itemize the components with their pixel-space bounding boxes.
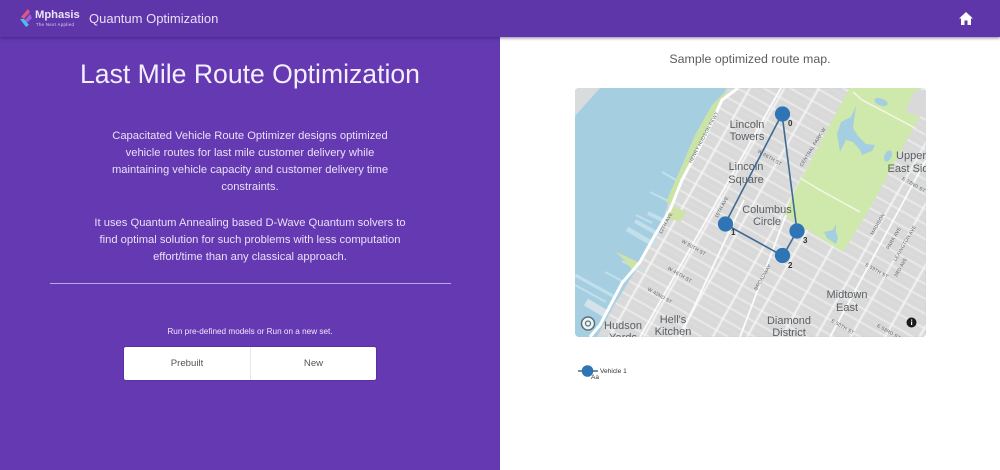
highway [590,88,738,337]
avenue highlights [640,88,926,337]
app name: Quantum Optimization [89,11,218,26]
stop labels: 1 [731,228,736,237]
place labels: Lincoln [729,161,763,173]
stop labels [731,119,808,270]
reservoir and lakes [837,106,875,155]
text block: quantum annealing description: effort/time than any classical approach. [153,250,347,262]
park path [853,92,915,128]
street labels: W 66TH ST [756,149,783,167]
button: Prebuilt: Prebuilt [171,358,203,369]
piers [575,172,683,314]
street labels: W 42ND ST [646,287,673,306]
street labels: 12TH AVE [658,212,674,235]
panel: left purple intro [0,0,500,470]
text block: optimizer description [112,130,388,192]
stop 0 [775,106,790,122]
place labels: Lincoln [730,119,764,131]
logo mark [20,9,32,27]
map provider badge [582,317,594,330]
stop labels: 2 [788,261,793,270]
button group [124,347,376,380]
place labels: Towers [730,131,765,143]
street labels: HENRY HUDSON PKWY [688,110,721,164]
street labels: MADISON [870,212,887,236]
legend: vehicle 1 [578,365,627,381]
street labels: LEXINGTON AVE [892,224,918,263]
land: Manhattan street grid [597,88,926,337]
street labels: E 59TH ST [864,262,889,280]
route lines: vehicle 1 [725,114,797,256]
title: Last Mile Route Optimization [80,59,420,89]
street labels: 3RD AVE [893,257,909,278]
text block: quantum annealing description: find optimal solution for such problems with less computation [100,234,400,246]
riverside park [666,90,727,205]
button: New: New [304,358,323,369]
legend: vehicle 1: Vehicle 1 [600,368,627,375]
place labels: Diamond [767,315,811,327]
icon: home [959,12,973,25]
street labels: PARK AVE [885,226,903,251]
pier park [616,252,640,272]
street labels: BROADWAY [753,263,773,292]
stop labels: 0 [788,119,793,128]
place labels: Upper [896,150,926,162]
land: New Jersey corner [575,88,600,116]
stop labels: 3 [803,236,808,245]
button: Prebuilt [124,347,251,380]
map heading: Sample optimized route map. [669,52,831,66]
text block: quantum annealing description: It uses Quantum Annealing based D-Wave Quantum solvers to [94,216,406,228]
street labels: E 72ND ST [901,176,926,194]
header bar [0,0,1000,37]
place labels: Square [728,174,764,186]
run options caption: Run pre-defined models or Run on a new set. [167,327,333,336]
chart: route map [575,88,926,337]
place labels: Circle [753,216,781,228]
text block: quantum annealing description [94,216,406,262]
park: Central Park [785,88,926,252]
wordmark: Mphasis [35,9,80,21]
place labels [604,119,928,344]
place labels: East [836,302,858,314]
legend: vehicle 1: Aa [591,374,599,381]
street labels: W 46TH ST [666,266,693,284]
place labels: Hell's [660,314,687,326]
stop 3 [789,223,805,239]
water: Hudson River [575,88,926,337]
place labels: Hudson [604,320,642,332]
logo: Mphasis [20,9,80,27]
street labels: 10TH AVE [714,196,730,219]
route stops [718,106,805,263]
text block: optimizer description: vehicle routes for last mile customer delivery while [126,146,374,158]
street labels [646,110,926,341]
text block: optimizer description: constraints. [221,180,279,192]
museum block [905,90,926,118]
place labels: Midtown [827,289,867,301]
stop 1 [718,216,733,232]
stop 2 [775,248,790,263]
tagline: The Next Applied [36,22,74,27]
place labels: Columbus [742,204,792,216]
info icon [906,318,916,328]
text block: optimizer description: Capacitated Vehicle Route Optimizer designs optimized [112,130,388,142]
text block: optimizer description: maintaining vehicle capacity and customer delivery time [112,164,388,176]
street labels: CENTRAL PARK W [799,127,828,168]
street labels: E 50TH ST [830,318,855,336]
street labels: W 50TH ST [680,239,707,257]
